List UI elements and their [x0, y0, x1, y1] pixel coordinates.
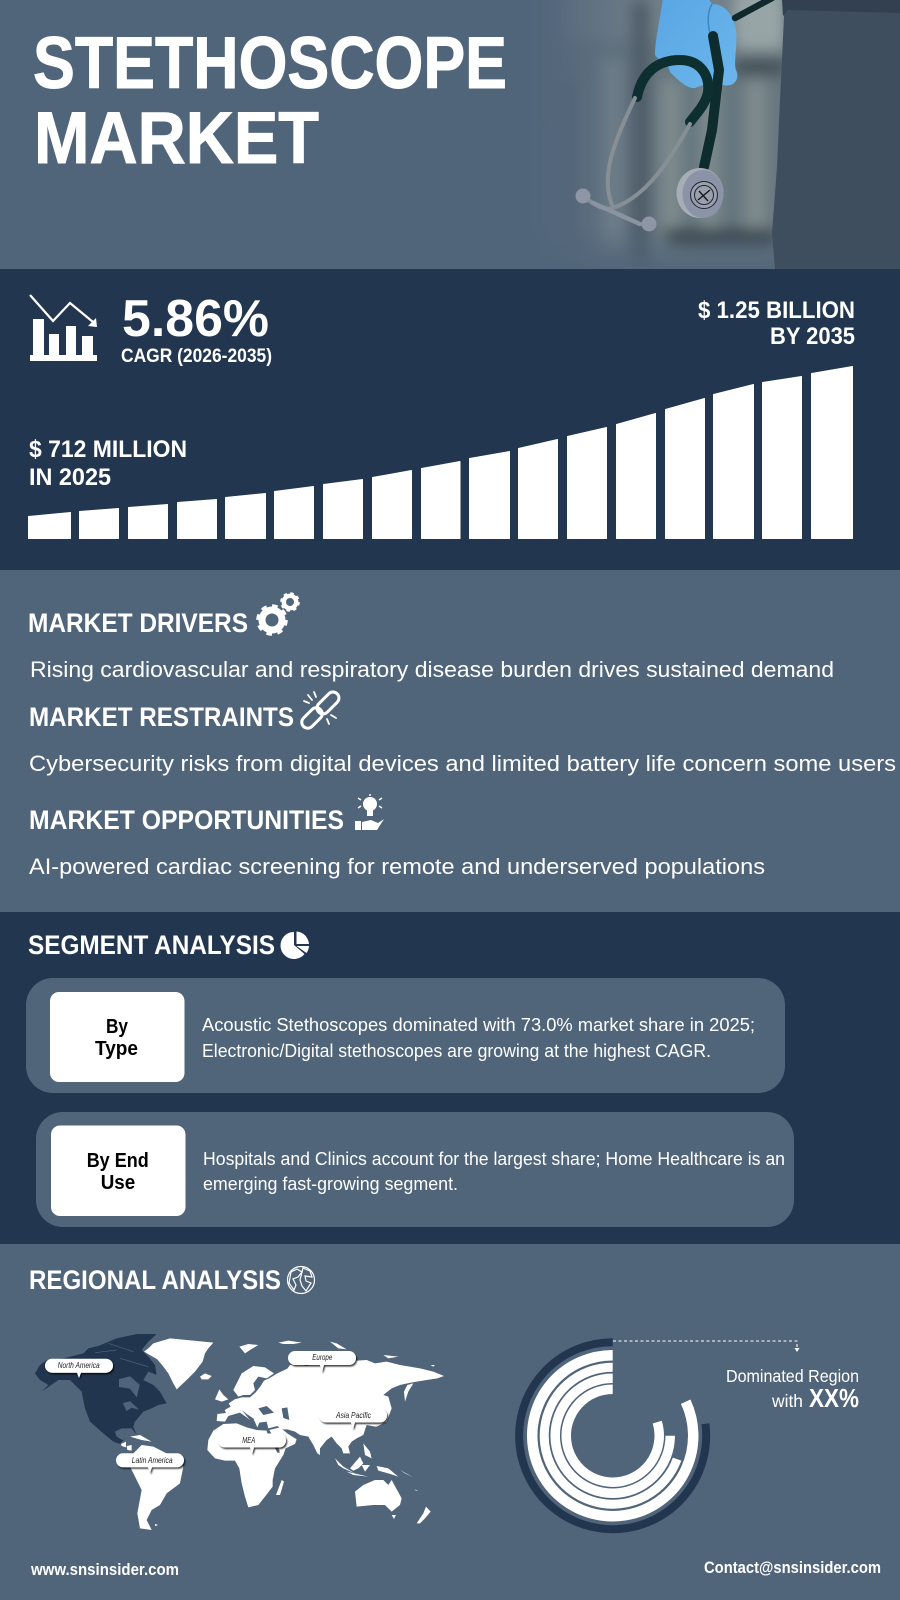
card: by type	[26, 978, 785, 1093]
text: opportunities: AI-powered cardiac screening for remote and underserved populations	[29, 854, 765, 879]
callout: MEA	[218, 1434, 286, 1454]
heading: market restraints: MARKET RESTRAINTS	[29, 702, 294, 732]
text: by type: Electronic/Digital stethoscopes are growing at the highest CAGR.	[202, 1041, 711, 1061]
heading: segment analysis: SEGMENT ANALYSIS	[28, 930, 275, 960]
text: by type: Acoustic Stethoscopes dominated with 73.0% market share in 2025;	[202, 1015, 755, 1035]
card: by end use	[36, 1112, 794, 1227]
footer: website: www.snsinsider.com	[30, 1560, 179, 1579]
heading: regional analysis: REGIONAL ANALYSIS	[29, 1265, 281, 1295]
heading: market opportunities: MARKET OPPORTUNITIES	[29, 805, 344, 835]
heading: market drivers: MARKET DRIVERS	[28, 608, 248, 638]
radial bar chart	[519, 1342, 706, 1529]
callout: Latin America: Latin America	[132, 1456, 173, 1465]
callout: Asia Pacific	[319, 1408, 387, 1429]
CAGR value: 5.86%	[122, 290, 269, 348]
text: dominated region: XX%	[809, 1383, 859, 1413]
callout: MEA: MEA	[242, 1436, 255, 1445]
callout: Asia Pacific: Asia Pacific	[335, 1411, 371, 1420]
text: dominated region	[726, 1366, 859, 1413]
photo: gloved hand holding stethoscope	[564, 0, 900, 269]
region: North America (highlighted)	[35, 1334, 167, 1444]
icon: pie chart	[281, 932, 309, 959]
panel: segment analysis	[0, 912, 900, 1244]
label: by end use	[51, 1126, 186, 1216]
icon: globe	[288, 1266, 314, 1294]
chest piece	[676, 168, 724, 218]
2025 value: $ 712 MILLION	[29, 436, 187, 463]
title: MARKET	[34, 98, 319, 179]
text: by type	[202, 1015, 755, 1061]
title: STETHOSCOPE	[33, 23, 507, 104]
coat sleeve	[772, 0, 900, 269]
icon: broken chain	[299, 690, 341, 731]
label: by end use: Use	[101, 1172, 135, 1194]
2025 value: IN 2025	[29, 464, 111, 491]
title	[33, 23, 507, 179]
world map	[35, 1334, 444, 1530]
label: by type: By	[106, 1016, 129, 1038]
text: dominated region: Dominated Region	[726, 1366, 859, 1386]
panel: header	[0, 0, 900, 269]
icon: declining chart	[30, 295, 97, 361]
text: dominated region: with	[771, 1391, 803, 1411]
text: by end use: Hospitals and Clinics account for the largest share; Home Healthcare is an	[203, 1149, 785, 1169]
panel: regional analysis	[0, 1244, 900, 1600]
icon: idea in hand	[355, 794, 384, 830]
label: by end use: By End	[87, 1150, 149, 1172]
text: restraints: Cybersecurity risks from digital devices and limited battery life concern some users	[29, 751, 896, 776]
icon: gears	[258, 593, 299, 634]
text: drivers: Rising cardiovascular and respiratory disease burden drives sustained demand	[30, 657, 834, 682]
glove	[655, 0, 737, 88]
2035 value: $ 1.25 BILLION	[698, 297, 855, 324]
callout: Latin America	[116, 1453, 184, 1473]
callout: Europe: Europe	[312, 1353, 333, 1362]
callout: Europe	[288, 1351, 356, 1372]
2025 value	[29, 436, 187, 491]
2035 value	[698, 297, 855, 350]
stethoscope	[576, 0, 772, 232]
CAGR label: CAGR (2026-2035)	[121, 346, 272, 367]
callout: North America	[45, 1359, 113, 1378]
label: by type	[50, 992, 184, 1082]
arrow: dashed leader	[613, 1341, 800, 1352]
bar chart: growth 2025 to 2035	[28, 366, 852, 538]
panel: market dynamics	[0, 570, 900, 912]
callout: North America: North America	[58, 1361, 100, 1370]
regions: white continents	[121, 1338, 444, 1530]
text: by end use	[203, 1149, 785, 1194]
panel: market size	[0, 269, 900, 570]
2035 value: BY 2035	[770, 323, 855, 350]
label: by type: Type	[95, 1038, 138, 1060]
text: by end use: emerging fast-growing segment.	[203, 1174, 458, 1194]
